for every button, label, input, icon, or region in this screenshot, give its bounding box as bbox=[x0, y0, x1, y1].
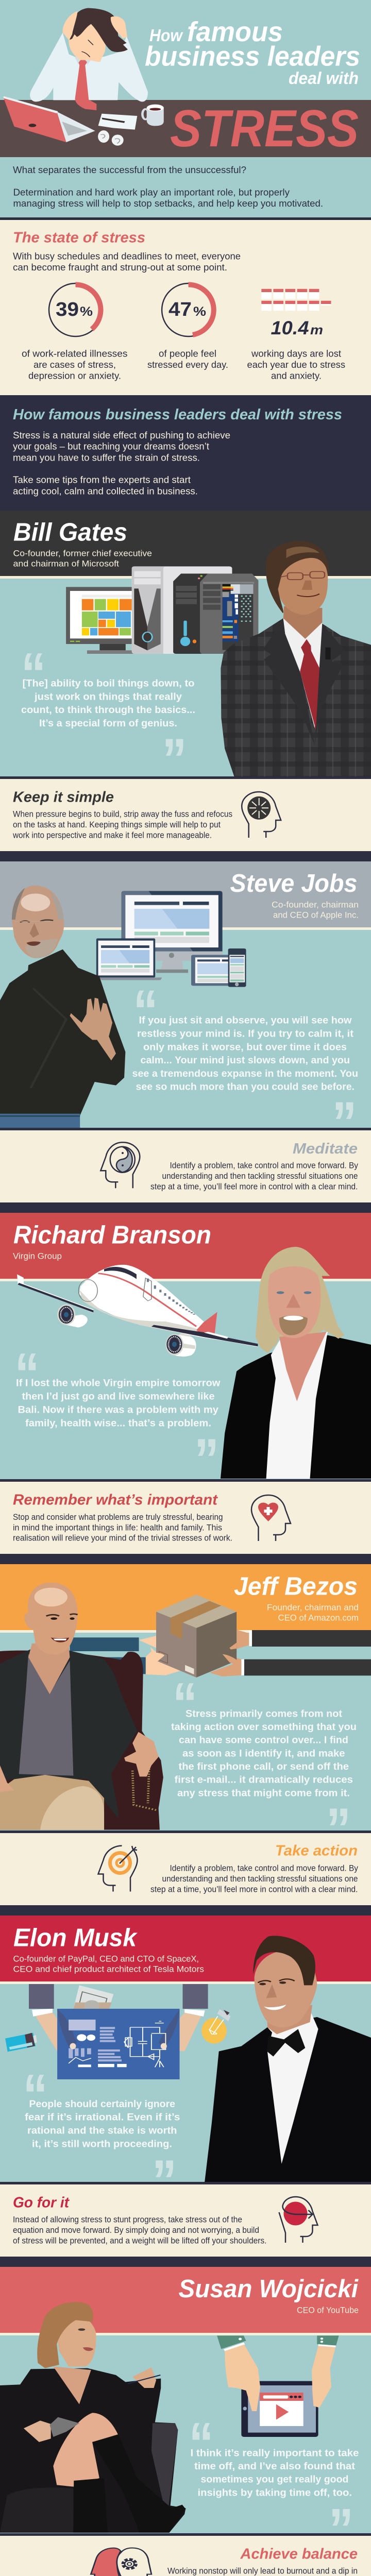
body text bbox=[12, 809, 232, 840]
panel: Bill Gates bbox=[0, 511, 371, 792]
quote: Stress primarily comes from not bbox=[185, 1708, 343, 1719]
quote: rational and the stake is worth bbox=[27, 2126, 177, 2137]
intro text: What separates the successful from the unsuccessful? bbox=[13, 164, 246, 175]
body text: your goals – but reaching your dreams doesn’t bbox=[13, 441, 209, 452]
stat captions: stressed every day. bbox=[147, 359, 228, 370]
quote: “ bbox=[21, 641, 46, 707]
icon: head with target bbox=[98, 1845, 137, 1892]
role: CEO of Amazon.com bbox=[278, 1613, 359, 1623]
quote: only makes it worse, but over time it does bbox=[143, 1042, 347, 1053]
role: and chairman of Microsoft bbox=[13, 558, 119, 569]
body text: on the tasks at hand. Keeping things simple will help to put bbox=[13, 820, 221, 829]
panel: tip remember what's important bbox=[0, 1482, 371, 1564]
panel: Susan Wojcicki bbox=[0, 2267, 371, 2563]
quote bbox=[14, 1342, 221, 1493]
role: Co-founder of PayPal, CEO and CTO of SpaceX, bbox=[13, 1954, 199, 1963]
body text: Identify a problem, take control and move forward. By bbox=[170, 1161, 358, 1171]
illustration: computers bbox=[66, 566, 258, 654]
quote: ” bbox=[329, 2497, 353, 2563]
stat captions: depression or anxiety. bbox=[28, 370, 121, 381]
title: business leaders bbox=[145, 41, 360, 72]
quote: “ bbox=[23, 2063, 47, 2128]
body text: Identify a problem, take control and move forward. By bbox=[170, 1863, 358, 1873]
role bbox=[272, 900, 359, 920]
quote: If I lost the whole Virgin empire tomorrow bbox=[16, 1378, 221, 1389]
quote: “ bbox=[14, 1342, 39, 1407]
body text: of stress will be prevented, and a weight will be lifted off your shoulders. bbox=[13, 2235, 267, 2245]
quote bbox=[21, 641, 195, 792]
photo: Elon Musk bbox=[205, 1936, 371, 2182]
body text: realisation will relieve your mind of the trivial stresses of work. bbox=[13, 1533, 232, 1543]
panel: the state of stress bbox=[0, 220, 371, 395]
title: deal with bbox=[289, 69, 359, 88]
title: How bbox=[149, 26, 183, 45]
quote: family, health wise... that’s a problem. bbox=[25, 1418, 211, 1429]
body text bbox=[150, 1863, 358, 1894]
quote: any stress that might come from it. bbox=[177, 1788, 350, 1799]
quote: I think it’s really important to take bbox=[191, 2448, 359, 2459]
role bbox=[267, 1603, 359, 1623]
stat: 47% ring: % bbox=[193, 304, 206, 319]
quote: first e-mail... it dramatically reduces bbox=[174, 1775, 353, 1786]
quote: then I’d just go and live somewhere like bbox=[22, 1392, 214, 1402]
photo: Bill Gates bbox=[221, 541, 371, 776]
title: famous bbox=[187, 16, 283, 47]
quote: Bali. Now if there was a problem with my bbox=[18, 1404, 218, 1415]
stat captions: each year due to stress bbox=[247, 359, 345, 370]
name: Jeff Bezos bbox=[234, 1573, 358, 1601]
quote: [The] ability to boil things down, to bbox=[23, 679, 195, 689]
intro text: Determination and hard work play an important role, but properly bbox=[13, 187, 290, 198]
stat captions: of people feel bbox=[159, 348, 216, 359]
name: Elon Musk bbox=[13, 1924, 138, 1952]
role: Co-founder, former chief executive bbox=[13, 548, 152, 558]
body text: can become fraught and strung-out at some point. bbox=[13, 262, 227, 273]
heading: Take action bbox=[275, 1843, 358, 1859]
photo: Jeff Bezos bbox=[0, 1583, 163, 1830]
body text: With busy schedules and deadlines to meet, everyone bbox=[13, 250, 241, 261]
body text: equation and move forward. By simply doing and not worrying, a build bbox=[13, 2225, 259, 2235]
quote bbox=[23, 2063, 180, 2214]
illustration: responsive devices bbox=[96, 891, 246, 987]
quote: insights by taking time off, too. bbox=[198, 2487, 352, 2498]
quote: can have some control over... I find bbox=[179, 1735, 348, 1746]
role: Founder, chairman and bbox=[267, 1603, 359, 1613]
quote: count, to think through the basics... bbox=[21, 705, 195, 716]
quote: just work on things that really bbox=[34, 691, 182, 702]
quote: “ bbox=[173, 1671, 197, 1737]
body text: step at a time, you’ll feel more in control with a clear mind. bbox=[150, 1181, 358, 1191]
quote: fear if it’s irrational. Even if it’s bbox=[25, 2112, 180, 2123]
illustration: hands with video tablet bbox=[217, 2335, 339, 2437]
quote: calm... Your mind just slows down, and you bbox=[140, 1055, 350, 1066]
panel: how leaders deal with stress bbox=[0, 395, 371, 511]
intro text: managing stress will help to stop setbacks, and help keep you motivated. bbox=[13, 198, 323, 209]
body text: Stop and consider what problems are truly stressful, bearing bbox=[13, 1512, 223, 1522]
icon: head with heart bbox=[251, 1495, 291, 1541]
body text bbox=[13, 430, 230, 496]
role: CEO of YouTube bbox=[297, 2305, 359, 2315]
stat captions: are cases of stress, bbox=[33, 359, 116, 370]
photo: Susan Wojcicki bbox=[0, 2302, 185, 2533]
role bbox=[13, 1954, 204, 1974]
heading: Remember what’s important bbox=[13, 1492, 218, 1509]
illustration: parcel handover bbox=[70, 1595, 371, 1677]
body text: mean you have to suffer the strain of stress. bbox=[13, 452, 200, 463]
stat: 39% ring bbox=[49, 283, 102, 336]
heading: How famous business leaders deal with stress bbox=[13, 406, 342, 423]
heading: Keep it simple bbox=[13, 789, 114, 806]
body text: acting cool, calm and collected in business. bbox=[13, 485, 198, 496]
panel: header bbox=[0, 0, 371, 220]
quote: see so much more than you could see before. bbox=[136, 1082, 355, 1093]
quote: restless your mind is. If you try to calm it, it bbox=[137, 1028, 354, 1039]
stat captions: of work-related illnesses bbox=[22, 348, 128, 359]
panel: tip achieve balance bbox=[0, 2536, 371, 2576]
heading: Go for it bbox=[13, 2194, 70, 2211]
quote: “ bbox=[133, 979, 158, 1044]
body text: step at a time, you’ll feel more in control with a clear mind. bbox=[150, 1884, 358, 1894]
body text: Take some tips from the experts and start bbox=[13, 474, 191, 485]
body text bbox=[150, 1161, 358, 1191]
quote: ” bbox=[326, 1797, 351, 1862]
role: Co-founder, chairman bbox=[272, 900, 359, 910]
panel: Elon Musk bbox=[0, 1916, 371, 2214]
icon: two heads with gear bbox=[91, 2548, 151, 2576]
quote bbox=[132, 979, 358, 1156]
body text: Working nonstop will only lead to burnout and a dip in bbox=[167, 2566, 358, 2576]
photo: Richard Branson bbox=[221, 1247, 371, 1479]
stat captions: and anxiety. bbox=[271, 370, 322, 381]
quote: People should certainly ignore bbox=[29, 2099, 175, 2110]
icon: head with focus arrows bbox=[242, 792, 281, 838]
stat: 39% ring: % bbox=[80, 304, 93, 319]
quote: ” bbox=[152, 2148, 177, 2214]
body text bbox=[13, 2215, 267, 2245]
body text: in mind the important things in life: health and family. This bbox=[13, 1522, 222, 1532]
quote: see a tremendous expanse in the moment. You bbox=[132, 1069, 358, 1079]
icon: head with yin yang bbox=[100, 1142, 140, 1188]
panel: Jeff Bezos bbox=[0, 1564, 371, 1862]
quote: ” bbox=[162, 727, 187, 792]
icon: head with arrow bbox=[279, 2197, 317, 2243]
panel: tip go for it bbox=[0, 2184, 371, 2267]
quote: ” bbox=[332, 1090, 357, 1156]
quote: “ bbox=[189, 2411, 213, 2477]
name: Richard Branson bbox=[13, 1221, 211, 1249]
stat captions: working days are lost bbox=[251, 348, 341, 359]
stat captions bbox=[22, 348, 345, 381]
quote: the first phone call, or send off the bbox=[178, 1761, 349, 1772]
name: Susan Wojcicki bbox=[178, 2275, 359, 2303]
stat: 47% ring bbox=[162, 283, 215, 336]
panel: Steve Jobs bbox=[0, 861, 371, 1156]
quote: sometimes you get really good bbox=[201, 2475, 348, 2485]
heading: Meditate bbox=[293, 1141, 358, 1157]
illustration: airplane bbox=[17, 1265, 258, 1357]
panel: tip keep it simple bbox=[0, 779, 371, 861]
heading: Achieve balance bbox=[240, 2546, 358, 2562]
title bbox=[145, 16, 360, 158]
role: Virgin Group bbox=[13, 1251, 62, 1261]
quote bbox=[171, 1671, 357, 1862]
stat: 10.4m calendar icon: m bbox=[310, 323, 323, 337]
body text: Instead of allowing stress to stunt progress, take stress out of the bbox=[13, 2215, 242, 2225]
role: CEO and chief product architect of Tesla Motors bbox=[13, 1964, 204, 1974]
quote: It’s a special form of genius. bbox=[39, 718, 177, 729]
quote: ” bbox=[194, 1427, 219, 1493]
photo: Steve Jobs bbox=[0, 886, 125, 1128]
stat: 39% ring: 39 bbox=[56, 299, 79, 320]
name: Steve Jobs bbox=[230, 870, 358, 897]
body text: When pressure begins to build, strip away the fuss and refocus bbox=[13, 809, 232, 819]
illustration: hands holding blueprint bbox=[5, 1984, 231, 2079]
body text bbox=[13, 250, 241, 273]
role: and CEO of Apple Inc. bbox=[273, 910, 359, 920]
panel: tip meditate bbox=[0, 1130, 371, 1213]
body text: work into perspective and make it feel more manageable. bbox=[12, 830, 212, 840]
panel: Richard Branson bbox=[0, 1213, 371, 1493]
illustration: stressed man at desk bbox=[4, 8, 164, 146]
quote: If you just sit and observe, you will see how bbox=[139, 1015, 352, 1026]
role bbox=[13, 548, 152, 569]
heading: The state of stress bbox=[13, 230, 145, 246]
name: Bill Gates bbox=[13, 518, 127, 546]
quote: as soon as I identify it, and make bbox=[182, 1748, 345, 1759]
stat: 47% ring: 47 bbox=[168, 299, 192, 320]
body text: Stress is a natural side effect of pushing to achieve bbox=[13, 430, 230, 440]
quote: it, it’s still worth proceeding. bbox=[32, 2139, 172, 2150]
body text bbox=[13, 1512, 232, 1543]
intro text bbox=[13, 164, 323, 209]
quote bbox=[189, 2411, 359, 2563]
quote: time off, and I’ve also found that bbox=[194, 2461, 356, 2472]
stat: 10.4m calendar icon bbox=[261, 289, 331, 338]
stat: 10.4m calendar icon: 10.4 bbox=[271, 317, 309, 338]
panel: tip take action bbox=[0, 1833, 371, 1916]
quote: taking action over something that you bbox=[171, 1722, 357, 1733]
